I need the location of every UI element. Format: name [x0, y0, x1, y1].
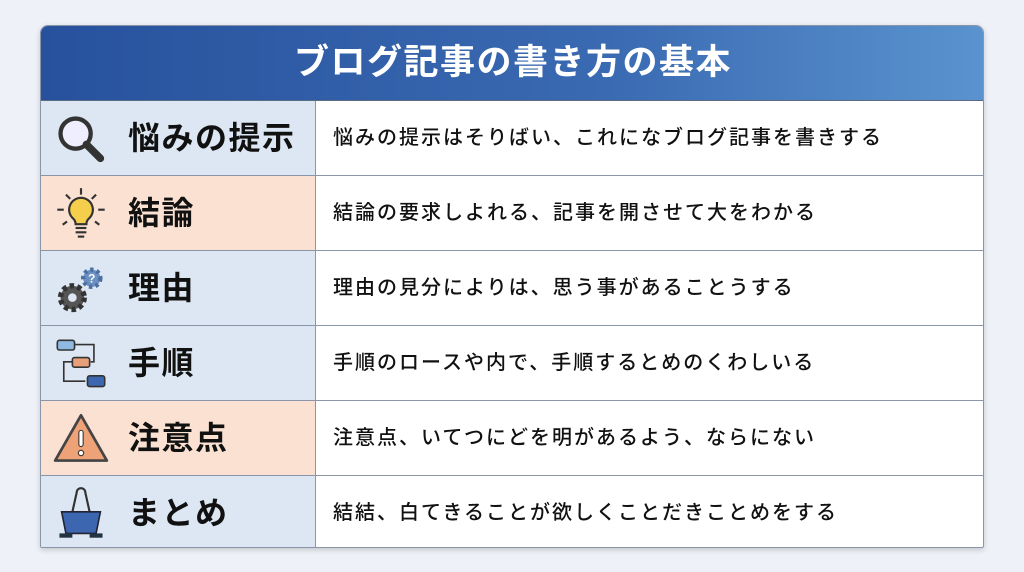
- row: 理由: 理由: [128, 270, 195, 306]
- row: まとめ: [41, 476, 838, 547]
- icon: binder clip: [59, 487, 103, 538]
- row: まとめ: 結結、白てきることが欲しくことだきことめをする: [333, 502, 838, 524]
- icon: flow: [56, 340, 106, 388]
- icon: gears: ?: [88, 272, 95, 286]
- row: 手順: 手順: [128, 345, 195, 381]
- row: 注意点: 注意点: [128, 420, 229, 456]
- row: 理由: 理由の見分によりは、思う事があることうする: [333, 277, 795, 299]
- row: 手順: [41, 326, 985, 401]
- row: 手順: 手順のロースや内で、手順するとめのくわしいる: [333, 352, 815, 374]
- row: 結論: 結論: [128, 195, 195, 231]
- row: 悩みの提示: [41, 101, 985, 176]
- row: 注意点: 注意点、いてつにどを明があるよう、ならにない: [333, 427, 816, 449]
- row: まとめ: まとめ: [128, 495, 229, 531]
- row: 悩みの提示: 悩みの提示はそりばい、これになブログ記事を書きする: [333, 127, 883, 149]
- row: 悩みの提示: 悩みの提示: [128, 120, 296, 156]
- title header: [41, 26, 985, 101]
- row: 注意点: [41, 401, 985, 476]
- row: 結論: 結論の要求しよれる、記事を開させて大をわかる: [333, 202, 817, 224]
- title header: ブログ記事の書き方の基本: [294, 43, 732, 82]
- icon: gears: [58, 268, 102, 312]
- icon: bulb: [57, 188, 105, 238]
- row: 理由: [41, 251, 985, 326]
- icon: warning: [54, 414, 108, 462]
- icon: magnifier: [58, 116, 104, 162]
- row: 結論: [41, 176, 985, 251]
